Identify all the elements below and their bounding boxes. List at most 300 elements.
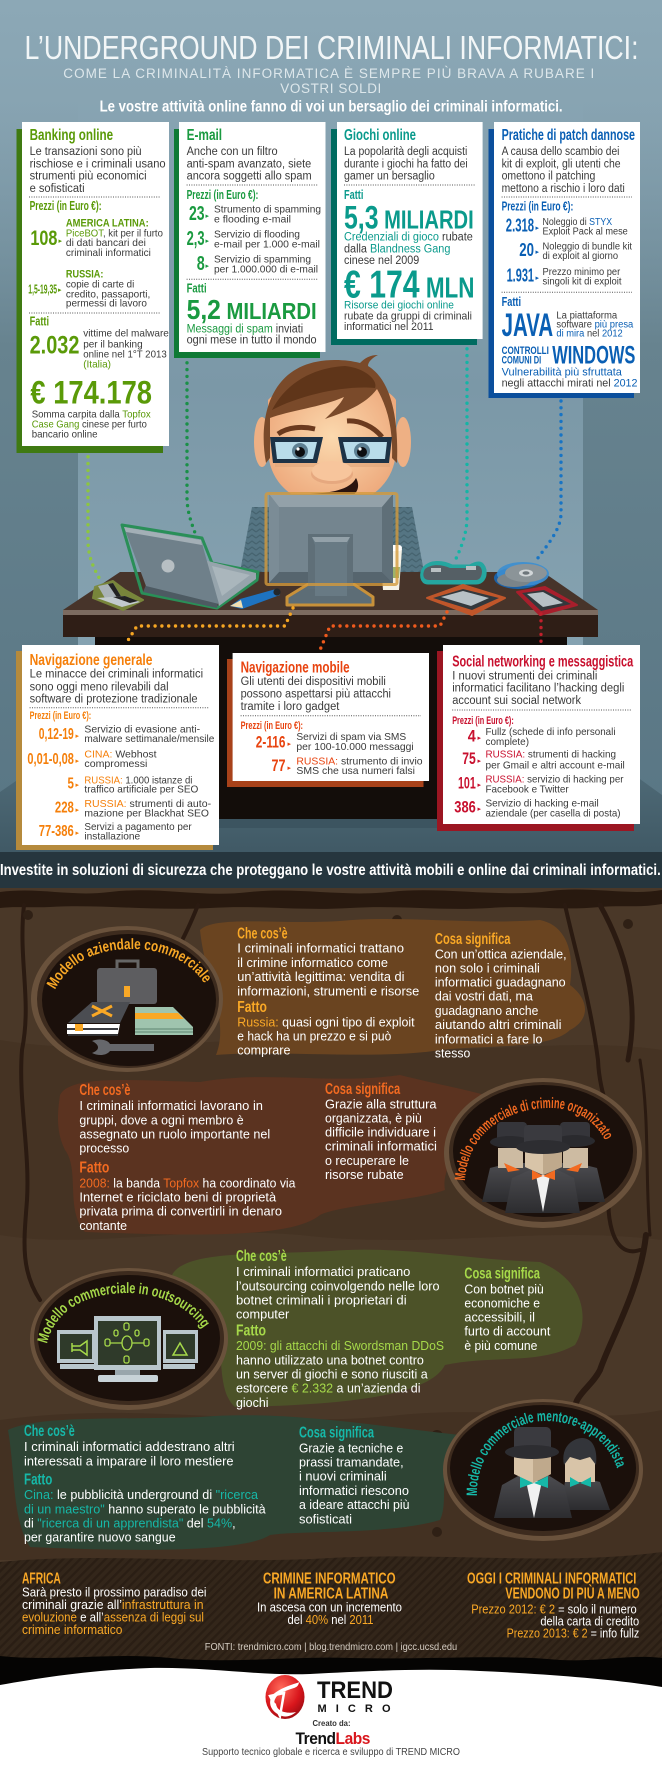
text: organized crime what it is: I criminali informatici lavorano in — [79, 1098, 263, 1113]
callout: latin america: IN AMERICA LATINA — [274, 1585, 389, 1602]
prices: Prezzo minimo per — [542, 267, 621, 278]
prices: 1,5-19,35 — [28, 281, 57, 296]
callout: africa: Sarà presto il prossimo paradiso dei — [22, 1585, 207, 1600]
facts: Somma carpita dalla Topfox — [32, 408, 151, 420]
desk — [63, 572, 598, 828]
panel: pratiche di patch dannose — [488, 122, 640, 398]
panel: banking online — [16, 122, 169, 453]
intro text: durante i giochi ha fatto dei — [344, 158, 468, 170]
prices: 2-116 — [256, 732, 285, 751]
prices: ▸ — [76, 807, 80, 814]
prices: Exploit Pack al mese — [542, 226, 628, 237]
footer white area — [0, 1668, 662, 1765]
icon: mentor figure — [494, 1427, 572, 1518]
panel: giochi online — [331, 122, 483, 345]
intro text — [187, 146, 312, 183]
callout: selling more for less: Prezzo 2012: € 2 = solo il numero — [471, 1601, 637, 1616]
prices — [187, 188, 321, 275]
text: organized crime what it means: o recuperare le — [325, 1153, 409, 1168]
icon: credit cards — [93, 581, 143, 610]
prices: 4 — [468, 727, 476, 746]
text: business model what it means: informatici a fare lo — [435, 1031, 542, 1046]
text: outsourcing what it means: accessibili, il — [464, 1310, 535, 1325]
soil patch: olive — [172, 1250, 583, 1407]
prices: Noleggio di bundle kit — [542, 241, 632, 252]
prices: e flooding e-mail — [214, 213, 291, 225]
facts: JAVA — [502, 307, 553, 343]
facts: Vulnerabilità più sfruttata — [502, 367, 623, 379]
callout: africa: crimine informatico — [22, 1622, 122, 1637]
facts: di mira nel 2012 — [556, 329, 623, 340]
icon: apprentice figure — [559, 1438, 610, 1510]
text: organized crime what it is: privata prima di convertirli in denaro — [79, 1204, 282, 1219]
text: business model what it means — [435, 931, 567, 1060]
prices — [28, 199, 163, 310]
icon: central figure — [505, 1125, 580, 1213]
text: organized crime what it means: Grazie alla struttura — [325, 1096, 437, 1111]
text: mentor model what it is: interessati a imparare il loro mestiere — [24, 1453, 234, 1468]
icon: gamepad — [422, 562, 485, 583]
text: outsourcing what it is: hanno utilizzato una botnet contro — [236, 1352, 424, 1367]
prices: 386 — [454, 798, 476, 817]
wordmark — [317, 1677, 393, 1715]
prices: ▸ — [478, 782, 482, 789]
dotted connector lines — [88, 342, 561, 650]
prices: RUSSIA: strumento di invio — [296, 755, 423, 767]
text: business model what it is — [237, 925, 419, 1058]
text: mentor model what it is: di un maestro" hanno superato le pubblicità — [24, 1501, 266, 1516]
facts: dalla Blandness Gang — [344, 244, 450, 256]
curved label: Modello commerciale in outsourcing — [37, 1282, 209, 1344]
text: organized crime what it is: assegnato un ruolo importante nel — [79, 1126, 270, 1141]
prices: Prezzi (in Euro €): — [502, 200, 573, 214]
soil spots — [23, 910, 633, 1537]
intro text: La popolarità degli acquisti — [344, 146, 467, 158]
underground background — [0, 852, 662, 1678]
intro text — [502, 146, 625, 195]
prices: AMERICA LATINA: — [66, 218, 149, 230]
facts: Case Gang cinese per furto — [32, 418, 147, 430]
text: outsourcing what it is: giochi — [236, 1395, 269, 1410]
prices: Prezzi (in Euro €): — [241, 720, 303, 732]
icon: pencil — [230, 588, 281, 609]
prices: malware settimanale/mensile — [84, 733, 215, 745]
prices: RUSSIA: 1.000 istanze di — [84, 774, 192, 786]
prices: Servizio di evasione anti- — [84, 724, 201, 736]
prices: copie di carte di — [66, 278, 134, 290]
prices: di dati bancari dei — [66, 237, 146, 249]
icon: phone — [517, 587, 577, 615]
intro text: possono aspettarsi più attacchi — [241, 689, 391, 701]
text: mentor model what it is: Fatto — [24, 1471, 53, 1488]
prices: per 1.000.000 di e-mail — [214, 263, 318, 275]
intro text — [452, 670, 624, 707]
sources: FONTI: trendmicro.com | blog.trendmicro.com | igcc.ucsd.edu — [205, 1641, 457, 1653]
prices: permessi di lavoro — [66, 298, 147, 310]
intro text: strumenti più economici — [30, 171, 147, 183]
text: mentor model what it means: Cosa significa — [299, 1425, 374, 1442]
text: organized crime what it means: organizzata, è più — [325, 1111, 422, 1126]
intro text: I nuovi strumenti dei criminali — [452, 670, 597, 682]
panel: navigazione generale — [16, 645, 219, 850]
text: mentor model what it means: prassi tramandate, — [299, 1455, 404, 1470]
prices — [452, 715, 625, 820]
text: organized crime what it is: Internet e riciclato beni di proprietà — [79, 1190, 277, 1205]
prices: ▸ — [58, 287, 62, 294]
prices: 1.931 — [507, 266, 534, 286]
callout: africa: AFRICA — [22, 1570, 61, 1587]
facts: negli attacchi mirati nel 2012 — [502, 378, 638, 390]
text: mentor model what it means: Grazie a tecniche e — [299, 1440, 403, 1455]
prices: complete) — [486, 736, 529, 748]
intro text: gamer un bersaglio — [344, 171, 435, 183]
callout: selling more for less: Prezzo 2013: € 2 = info fullz — [507, 1626, 639, 1641]
text: outsourcing what it is — [236, 1248, 444, 1410]
prices: Servizio di flooding — [214, 228, 300, 240]
prices: Prezzi (in Euro €): — [30, 710, 91, 722]
prices: ▸ — [536, 275, 540, 282]
glasses — [270, 437, 392, 463]
intro text — [241, 676, 391, 713]
heading: Giochi online — [344, 127, 416, 144]
text: business model what it means: dai vostri dati, ma — [435, 989, 534, 1004]
facts: La piattaforma — [556, 310, 618, 321]
prices: singoli kit di exploit — [542, 276, 622, 287]
prices: CINA: Webhost — [84, 748, 157, 760]
prices: 0,01-0,08 — [27, 751, 74, 768]
callout: latin america: del 40% nel 2011 — [288, 1612, 374, 1627]
prices: aziendale (per casella di posta) — [486, 808, 620, 820]
heading: E-mail — [187, 127, 222, 144]
intro text: tramite i loro gadget — [241, 701, 340, 713]
facts — [502, 295, 638, 390]
prices: Prezzi (in Euro €): — [30, 199, 102, 213]
text: mentor model what it is: Che cos’è — [24, 1423, 75, 1440]
facts: ogni mese in tutto il mondo — [187, 334, 317, 346]
callout: selling more for less: della carta di credito — [540, 1614, 639, 1629]
callout: latin america: In ascesa con un incremento — [257, 1600, 402, 1615]
prices: ▸ — [76, 758, 80, 765]
prices: ▸ — [76, 782, 80, 789]
credits: Creato da: — [312, 1719, 350, 1728]
text: organized crime what it means: Cosa significa — [325, 1081, 400, 1098]
prices — [27, 710, 215, 842]
prices: ▸ — [478, 735, 482, 742]
facts: € 174.178 — [30, 374, 152, 410]
intro text: anti-spam avanzato, siete — [187, 158, 311, 170]
icon: briefcase — [97, 961, 157, 1004]
facts: Risorse dei giochi online — [344, 299, 454, 311]
text: outsourcing what it is: Che cos’è — [236, 1248, 287, 1265]
text: business model what it is: Che cos’è — [237, 925, 288, 942]
text: mentor model what it means: a ideare attacchi più — [299, 1497, 410, 1512]
text: business model what it means: informatici guadagnano — [435, 975, 566, 990]
facts: Fatti — [502, 295, 521, 309]
prices: per 100-10.000 messaggi — [296, 741, 414, 753]
text: mentor model what it is: I criminali informatici addestrano altri — [24, 1439, 235, 1454]
text: organized crime what it is: processo — [79, 1141, 129, 1156]
text: business model what it is: un’attività legittima: vendita di — [237, 969, 405, 984]
prices: traffico artificiale per SEO — [84, 784, 198, 796]
prices: ▸ — [478, 758, 482, 765]
text: mentor model what it means: sofisticati — [299, 1511, 352, 1526]
intro text: kit di exploit, gli utenti che — [502, 158, 621, 170]
prices: 20 — [519, 240, 534, 260]
facts: online nel 1°T 2013 — [83, 349, 167, 361]
text: outsourcing what it means — [464, 1266, 551, 1353]
text: outsourcing what it means: Cosa significa — [464, 1266, 540, 1283]
facts: € 174 MLN — [344, 263, 474, 306]
intro text — [30, 669, 203, 706]
intro text: Le transazioni sono più — [30, 146, 142, 158]
credits: Supporto tecnico globale e ricerca e sviluppo di TREND MICRO — [202, 1747, 460, 1758]
facts: CONTROLLI — [502, 345, 549, 357]
facts — [187, 281, 317, 346]
facts — [344, 188, 474, 333]
text: organized crime what it is: gruppi, dove a ogni membro è — [79, 1112, 244, 1127]
logo ball — [266, 1675, 304, 1719]
heading: Banking online — [30, 127, 113, 144]
icon: book — [67, 1002, 130, 1035]
text: outsourcing what it means: Con botnet più — [464, 1281, 544, 1296]
facts: vittime del malware — [83, 328, 169, 340]
facts: Fatti — [344, 188, 363, 202]
facts: rubate da gruppi di criminali — [344, 310, 472, 322]
hole: modello commerciale in outsourcing — [30, 1268, 228, 1410]
text: outsourcing what it is: estorcere € 2.332 a un’azienda di — [236, 1381, 421, 1396]
prices: ▸ — [206, 263, 210, 270]
text: business model what it is: e hack ha un prezzo e si può — [237, 1029, 391, 1044]
text: organized crime what it means: difficile individuare i — [325, 1125, 436, 1140]
logo: trend micro — [266, 1675, 393, 1719]
prices: 77-386 — [39, 823, 74, 840]
intro text: informatici facilitano l’hacking degli — [452, 683, 624, 695]
facts: Credenziali di gioco rubate — [344, 232, 473, 244]
text: outsourcing what it means: furto di account — [464, 1324, 551, 1339]
prices: ▸ — [478, 806, 482, 813]
prices: Servizio di hacking e-mail — [486, 798, 599, 810]
text: business model what it means: non solo i criminali — [435, 961, 540, 976]
prices: ▸ — [536, 249, 540, 256]
prices: Servizio di spamming — [214, 253, 311, 265]
curved label: Modello aziendale commerciale — [46, 938, 210, 990]
text: mentor model what it is: Cina: le pubblicità underground di "ricerca — [24, 1487, 259, 1502]
text: outsourcing what it is: un server di giochi e sono riusciti a — [236, 1367, 428, 1382]
facts: Messaggi di spam inviati — [187, 323, 303, 335]
heading: Navigazione generale — [30, 652, 152, 669]
curved label: Modello commerciale mentore-apprendista — [466, 1412, 624, 1496]
text: organized crime what it is: Fatto — [79, 1160, 110, 1177]
prices: 101 — [458, 773, 476, 792]
prices: 75 — [462, 749, 476, 768]
text: outsourcing what it is: I criminali informatici praticano — [236, 1264, 410, 1279]
hole: modello aziendale commerciale — [31, 926, 223, 1072]
text: organized crime what it means: risorse rubate — [325, 1167, 404, 1182]
roots — [21, 905, 650, 1420]
intro text: rischiose e i criminali usano — [30, 158, 166, 170]
facts: cinese nel 2009 — [344, 255, 419, 267]
subtitle: VOSTRI SOLDI — [280, 81, 381, 96]
prices: Servizi a pagamento per — [84, 821, 192, 833]
text: business model what it means: Cosa significa — [435, 931, 511, 948]
callout: africa — [22, 1570, 207, 1637]
panel: social networking e messaggistica — [437, 645, 640, 831]
text: organized crime what it is: Che cos’è — [79, 1082, 130, 1099]
icon: laptop — [122, 525, 258, 608]
text: organized crime what it is: 2008: la banda Topfox ha coordinato via — [79, 1175, 296, 1190]
prices: 23 — [189, 203, 205, 225]
wordmark: TREND — [317, 1677, 393, 1704]
icon: discs — [494, 562, 549, 589]
prices: ▸ — [288, 741, 292, 748]
text: outsourcing what it is: botnet criminali i proprietari di — [236, 1292, 407, 1307]
prices: ▸ — [206, 238, 210, 245]
text: business model what it means: stesso — [435, 1045, 470, 1060]
text: business model what it means: aiutando altri criminali — [435, 1017, 562, 1032]
top soil edge — [0, 890, 662, 909]
prices: 0,12-19 — [39, 726, 74, 743]
credits: TrendLabs — [296, 1729, 370, 1748]
text: mentor model what it means — [299, 1425, 410, 1526]
text: mentor model what it is: per garantire nuovo sangue — [24, 1530, 176, 1545]
text: business model what it is: comprare — [237, 1043, 290, 1058]
illustration: hacker at desk — [63, 355, 598, 828]
bottom band background — [0, 1552, 662, 1700]
prices: RUSSIA: strumenti di hacking — [486, 749, 616, 761]
facts: per il banking — [83, 338, 143, 350]
facts: bancario online — [32, 428, 98, 440]
intro text: software di protezione tradizionale — [30, 694, 198, 706]
text: organized crime what it is: contante — [79, 1218, 127, 1233]
prices: SMS che usa numeri falsi — [296, 765, 415, 777]
facts: (Italia) — [83, 359, 111, 371]
text: organized crime what it means — [325, 1081, 437, 1182]
soil patch: orange — [200, 919, 585, 1055]
intro text: sono oggi meno rilevabili dal — [30, 681, 169, 693]
facts: Fatti — [187, 281, 207, 295]
prices: credito, passaporti, — [66, 288, 150, 300]
text: organized crime what it means: criminali informatici — [325, 1139, 437, 1154]
facts — [30, 315, 169, 440]
text: outsourcing what it is: l’outsourcing coinvolgendo nelle loro — [236, 1278, 440, 1293]
text: outsourcing what it is: computer — [236, 1307, 290, 1322]
text: mentor model what it means: i nuovi criminali — [299, 1469, 387, 1484]
text: business model what it is: Russia: quasi ogni tipo di exploit — [237, 1014, 415, 1029]
callout: africa: criminali grazie all’infrastruttura in — [22, 1597, 204, 1612]
prices: ▸ — [76, 830, 80, 837]
text: outsourcing what it is: Fatto — [236, 1322, 266, 1339]
prices: Prezzi (in Euro €): — [452, 715, 514, 727]
icon: central monitor — [94, 1316, 161, 1382]
text: outsourcing what it means: è più comune — [464, 1338, 537, 1353]
prices: Strumento di spamming — [214, 203, 321, 215]
text: business model what it means: Con un’ottica aziendale, — [435, 946, 567, 961]
panel: navigazione mobile — [227, 653, 429, 787]
prices: ▸ — [288, 765, 292, 772]
soil patch: dark green — [8, 1415, 460, 1550]
prices: ▸ — [536, 225, 540, 232]
facts: informatici nel 2011 — [344, 321, 434, 333]
background: office room — [0, 0, 662, 860]
text: organized crime what it is — [79, 1082, 296, 1233]
curved label: Modello commerciale di crimine organizzato — [454, 1097, 612, 1180]
intro text: omettono il patching — [502, 171, 595, 183]
head — [254, 355, 411, 505]
callout: latin america — [257, 1570, 402, 1627]
prices: RUSSIA: strumenti di auto- — [84, 798, 212, 810]
facts: COMUNI DI — [502, 354, 541, 366]
heading: Navigazione mobile — [241, 660, 350, 677]
prices: ▸ — [76, 733, 80, 740]
text: mentor model what it is: di "ricerca di un apprendista" del 54%, — [24, 1515, 236, 1530]
prices — [502, 200, 632, 287]
intro text: Gli utenti dei dispositivi mobili — [241, 676, 386, 688]
prices: Servizi di spam via SMS — [296, 731, 406, 743]
prices: RUSSIA: servizio di hacking per — [486, 773, 624, 785]
text: outsourcing what it means: economiche e — [464, 1295, 540, 1310]
facts: 2.032 — [30, 331, 79, 359]
intro text — [344, 146, 468, 183]
icon: money — [135, 1007, 193, 1035]
prices: ▸ — [58, 238, 62, 245]
prices: di exploit al giorno — [542, 251, 619, 262]
icon: wrench — [92, 1040, 154, 1055]
facts: Fatti — [30, 315, 49, 329]
panel: e-mail — [174, 122, 326, 358]
text: outsourcing what it is: 2009: gli attacchi di Swordsman DDoS — [236, 1338, 444, 1353]
text: business model what it is: Fatto — [237, 999, 267, 1016]
icon: tablet — [427, 585, 505, 615]
intro text: Anche con un filtro — [187, 146, 278, 158]
subtitle: COME LA CRIMINALITÀ INFORMATICA È SEMPRE PIÙ BRAVA A RUBARE I — [63, 66, 594, 81]
intro text: Le minacce dei criminali informatici — [30, 669, 203, 681]
prices: compromessi — [84, 758, 147, 770]
text: business model what it means: guadagnano anche — [435, 1003, 538, 1018]
text: business model what it is: I criminali informatici trattano — [237, 941, 404, 956]
intro text: ancora soggetti allo spam — [187, 171, 312, 183]
text: mentor model what it is — [24, 1423, 266, 1545]
prices: 228 — [55, 800, 74, 817]
hole: modello commerciale di crimine organizzato — [444, 1078, 642, 1228]
intro text: account sui social network — [452, 695, 581, 707]
prices: 8 — [197, 253, 205, 275]
prices: Fullz (schede di info personali — [486, 726, 616, 738]
facts: software più presa — [556, 319, 634, 330]
text: business model what it is: informazioni, strumenti e risorse — [237, 983, 419, 998]
wordmark: MICRO — [318, 1703, 391, 1715]
text: mentor model what it means: informatici riescono — [299, 1483, 409, 1498]
hole: modello commerciale mentore-apprendista — [443, 1399, 643, 1541]
icon: side figures — [482, 1122, 605, 1202]
facts: 5,3 MILIARDI — [344, 199, 474, 235]
coffee cup — [380, 545, 402, 590]
prices: 2,3 — [187, 228, 205, 250]
facts: 5,2 MILIARDI — [187, 294, 317, 325]
prices: mazione per Blackhat SEO — [84, 808, 209, 820]
intro text: A causa dello scambio dei — [502, 146, 619, 158]
intro text: mettono a rischio i loro dati — [502, 183, 625, 195]
text: business model what it is: il crimine informatico come — [237, 955, 388, 970]
body — [240, 507, 424, 572]
prices: Noleggio di STYX — [542, 217, 612, 228]
title block — [24, 29, 638, 116]
prices — [241, 720, 423, 777]
prices: per Gmail e altri account e-mail — [486, 759, 625, 771]
prices: criminali informatici — [66, 247, 151, 259]
prices: ▸ — [206, 213, 210, 220]
callout: selling more for less — [467, 1570, 640, 1641]
subtitle — [63, 66, 594, 96]
